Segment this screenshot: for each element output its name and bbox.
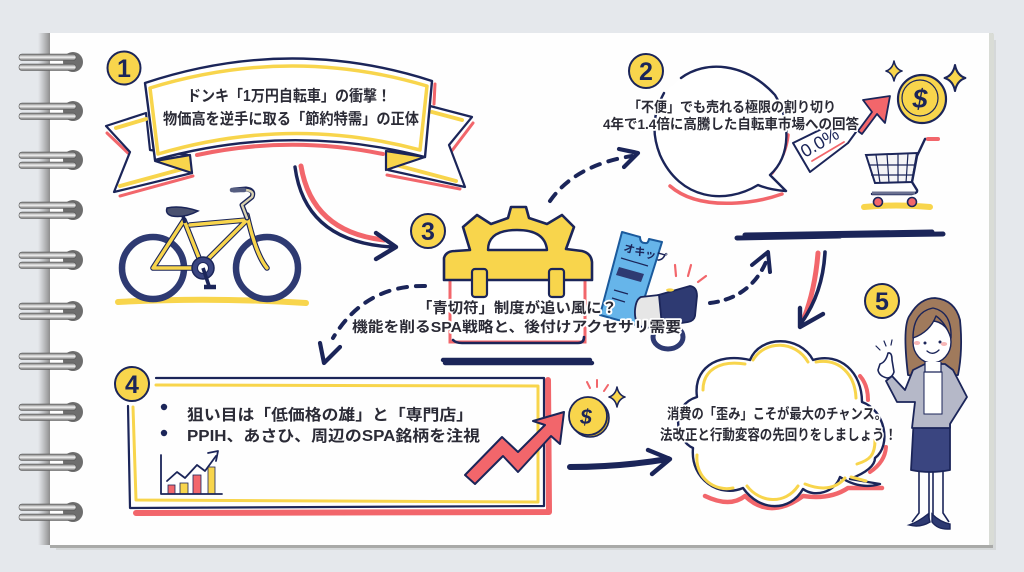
badge 1	[108, 52, 140, 84]
badge 5: 5	[875, 288, 889, 316]
arrow: ribbon to section 3	[295, 166, 396, 259]
cloud text: 消費の「歪み」こそが最大のチャンス。	[667, 405, 887, 423]
dashed arrow: section 3 to 4	[320, 286, 425, 363]
thick divider centre	[443, 360, 592, 363]
badge 4	[115, 367, 149, 401]
cloud text: 法改正と行動変容の先回りをしましょう！	[660, 427, 897, 444]
icon: gold coin	[898, 75, 946, 123]
thick divider right	[737, 232, 943, 238]
bubble 2 text: 「不便」でも売れる極限の割り切り	[628, 99, 836, 115]
arrow: section 4 to cloud	[570, 450, 670, 474]
ribbon right tail	[386, 106, 473, 189]
section 3 text	[352, 299, 681, 336]
icon: gold coin: $	[911, 84, 928, 114]
ribbon heading text	[163, 87, 419, 128]
toolbox handle hole	[488, 230, 547, 250]
section 3 text: 「青切符」制度が追い風に？	[417, 299, 617, 317]
speech bubble 2	[654, 67, 788, 203]
toolbox clasps	[472, 269, 564, 297]
icon: coin and sparkle	[569, 380, 625, 437]
icons: sparkles	[886, 61, 965, 91]
icon: price tag	[793, 121, 856, 172]
thumb sparkle marks	[876, 340, 892, 350]
fringe	[913, 308, 951, 338]
bubble 2 text	[603, 99, 859, 132]
legs	[912, 470, 949, 522]
illustration: businesswoman	[876, 298, 967, 529]
icon: bike light	[635, 265, 706, 349]
icon: ticket: オキップ	[622, 241, 668, 265]
icon: coin and sparkle: $	[579, 406, 592, 429]
badge 1: 1	[117, 55, 131, 83]
shoes	[909, 514, 950, 529]
section 4 bullets: PPIH、あさひ、周辺のSPA銘柄を注視	[187, 427, 481, 445]
arrow: down to cloud	[800, 252, 825, 327]
badge 3: 3	[421, 218, 435, 246]
mini bar chart	[161, 451, 222, 494]
badge 4: 4	[125, 371, 139, 399]
ribbon heading text: 物価高を逆手に取る「節約特需」の正体	[163, 109, 419, 128]
panel: section 4 box	[128, 378, 549, 513]
section 4 bullets: 狙い目は「低価格の雄」と「専門店」	[187, 405, 473, 424]
section 3 text: 機能を削るSPA戦略と、後付けアクセサリ需要	[352, 318, 681, 336]
toolbox gear lid	[444, 207, 592, 280]
neck	[925, 362, 941, 372]
ribbon heading text: ドンキ「1万円自転車」の衝撃！	[187, 87, 391, 105]
icon: price tag: 0.0%	[797, 124, 843, 161]
badge 3	[411, 214, 445, 248]
badge 5	[865, 284, 899, 318]
icon: rising red arrow	[858, 96, 890, 134]
icon: ticket	[600, 232, 668, 325]
hand thumbs up	[878, 353, 894, 378]
ribbon main band	[145, 58, 435, 160]
dashed arrow: section 3 to 2	[550, 149, 638, 201]
icon: shopping cart	[864, 139, 938, 207]
bubble 2 text: 4年で1.4倍に高騰した自転車市場への回答	[603, 116, 859, 132]
badge 2	[629, 54, 663, 88]
facial features	[914, 340, 947, 353]
cloud text	[660, 405, 897, 444]
icon: toolbox gear	[444, 207, 592, 343]
icon: bicycle	[118, 189, 306, 303]
face	[913, 321, 951, 363]
dashed arrow: section 3 to divider	[710, 252, 770, 303]
toolbox lower body	[450, 280, 585, 343]
icon: red zigzag arrow	[465, 412, 564, 484]
badge 2: 2	[639, 58, 653, 86]
hair	[905, 298, 961, 380]
section 4 bullets	[161, 404, 481, 445]
cloud speech bubble	[678, 341, 886, 508]
skirt	[911, 415, 950, 472]
spiral binding	[19, 52, 83, 522]
title ribbon	[106, 58, 473, 196]
blazer and blouse	[886, 364, 967, 428]
ribbon left tail	[106, 113, 193, 196]
